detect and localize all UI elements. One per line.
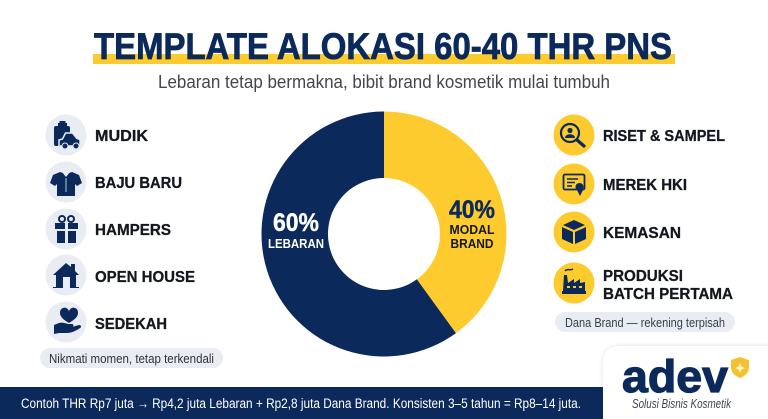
- item: hampers: HAMPERS: [95, 222, 171, 239]
- item: produksi batch pertama: BATCH PERTAMA: [603, 286, 733, 303]
- panel: modal brand list: [554, 114, 735, 332]
- item: riset dan sampel: RISET & SAMPEL: [603, 128, 725, 145]
- note: dana brand: Dana Brand — rekening terpisah: [565, 315, 725, 330]
- item: kemasan: KEMASAN: [603, 225, 681, 242]
- item: mudik: [46, 114, 148, 156]
- item: merek hki: MEREK HKI: [603, 177, 687, 194]
- note: dana brand: [555, 312, 735, 332]
- item: produksi batch pertama: PRODUKSI: [603, 268, 683, 285]
- note: nikmati momen: [40, 348, 223, 368]
- subtitle: Lebaran tetap bermakna, bibit brand kosmetik mulai tumbuh: [158, 72, 610, 92]
- segment: 60% lebaran: [261, 111, 456, 357]
- label: 60% lebaran: 60%: [273, 209, 319, 237]
- item: open house: OPEN HOUSE: [95, 269, 195, 286]
- label: 40% modal brand: [449, 196, 495, 251]
- title: TEMPLATE ALOKASI 60-40 THR PNS: [94, 26, 672, 67]
- item: kemasan: [554, 212, 681, 252]
- item: open house: [46, 254, 195, 296]
- item: produksi batch pertama: [554, 262, 733, 304]
- footer bar: [0, 387, 604, 419]
- segment: 40% modal brand: [384, 112, 506, 333]
- label: 40% modal brand: 40%: [449, 196, 495, 224]
- item: baju baru: [46, 162, 182, 202]
- logo card: [603, 346, 768, 419]
- item: baju baru: BAJU BARU: [95, 175, 182, 192]
- label: 60% lebaran: [268, 209, 324, 251]
- item: merek hki: [554, 164, 687, 204]
- item: mudik: MUDIK: [95, 128, 148, 145]
- label: 60% lebaran: LEBARAN: [268, 236, 324, 251]
- footer bar: Contoh THR Rp7 juta → Rp4,2 juta Lebaran + Rp2,8 juta Dana Brand. Konsisten 3–5 tahun = Rp8–14 juta.: [21, 396, 581, 411]
- item: sedekah: [46, 302, 167, 342]
- icon: shield: [731, 357, 749, 378]
- donut chart: [261, 111, 506, 357]
- note: nikmati momen: Nikmati momen, tetap terkendali: [49, 351, 214, 366]
- panel: lebaran list: [40, 114, 223, 368]
- item: hampers: [46, 208, 171, 250]
- item: riset dan sampel: [554, 114, 725, 156]
- logo tagline: Solusi Bisnis Kosmetik: [632, 396, 732, 411]
- label: 40% modal brand: MODAL: [450, 222, 495, 237]
- item: sedekah: SEDEKAH: [95, 316, 167, 333]
- label: 40% modal brand: BRAND: [450, 236, 494, 251]
- logo wordmark: adev: [622, 351, 728, 402]
